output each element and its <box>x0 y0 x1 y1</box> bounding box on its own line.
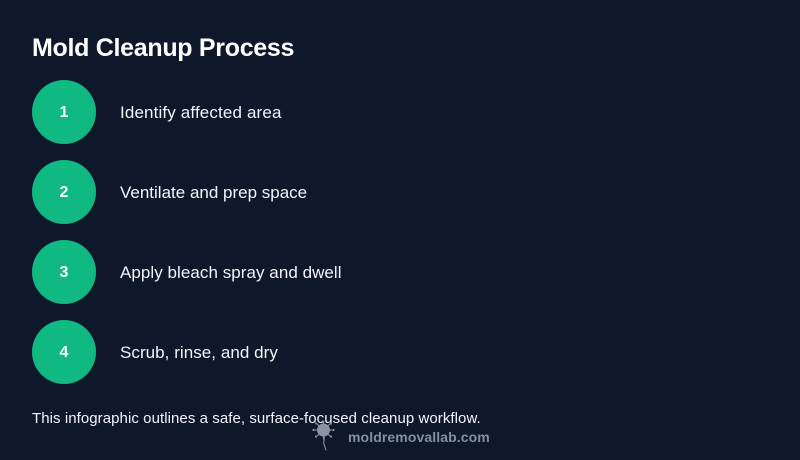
step 1 number badge: 1 <box>60 104 68 121</box>
step 4 number badge: 4 <box>60 344 68 361</box>
step 1 <box>32 80 282 144</box>
step 4 label: Scrub, rinse, and dry <box>120 343 278 362</box>
watermark brand text: moldremovallab.com <box>348 429 490 445</box>
step 3 number badge <box>32 240 96 304</box>
step 4 number badge <box>32 320 96 384</box>
step 1 label: Identify affected area <box>120 103 282 122</box>
step 3 <box>32 240 342 304</box>
step 1 number badge <box>32 80 96 144</box>
footer description: This infographic outlines a safe, surface-focused cleanup workflow. <box>32 410 481 427</box>
title: Mold Cleanup Process <box>32 34 294 62</box>
step 2 number badge: 2 <box>60 184 68 201</box>
step 3 number badge: 3 <box>60 264 68 281</box>
step 2 label: Ventilate and prep space <box>120 183 307 202</box>
icon: mold spore logo <box>312 420 334 451</box>
step 2 number badge <box>32 160 96 224</box>
step 3 label: Apply bleach spray and dwell <box>120 263 342 282</box>
step 2 <box>32 160 307 224</box>
step 4 <box>32 320 278 384</box>
